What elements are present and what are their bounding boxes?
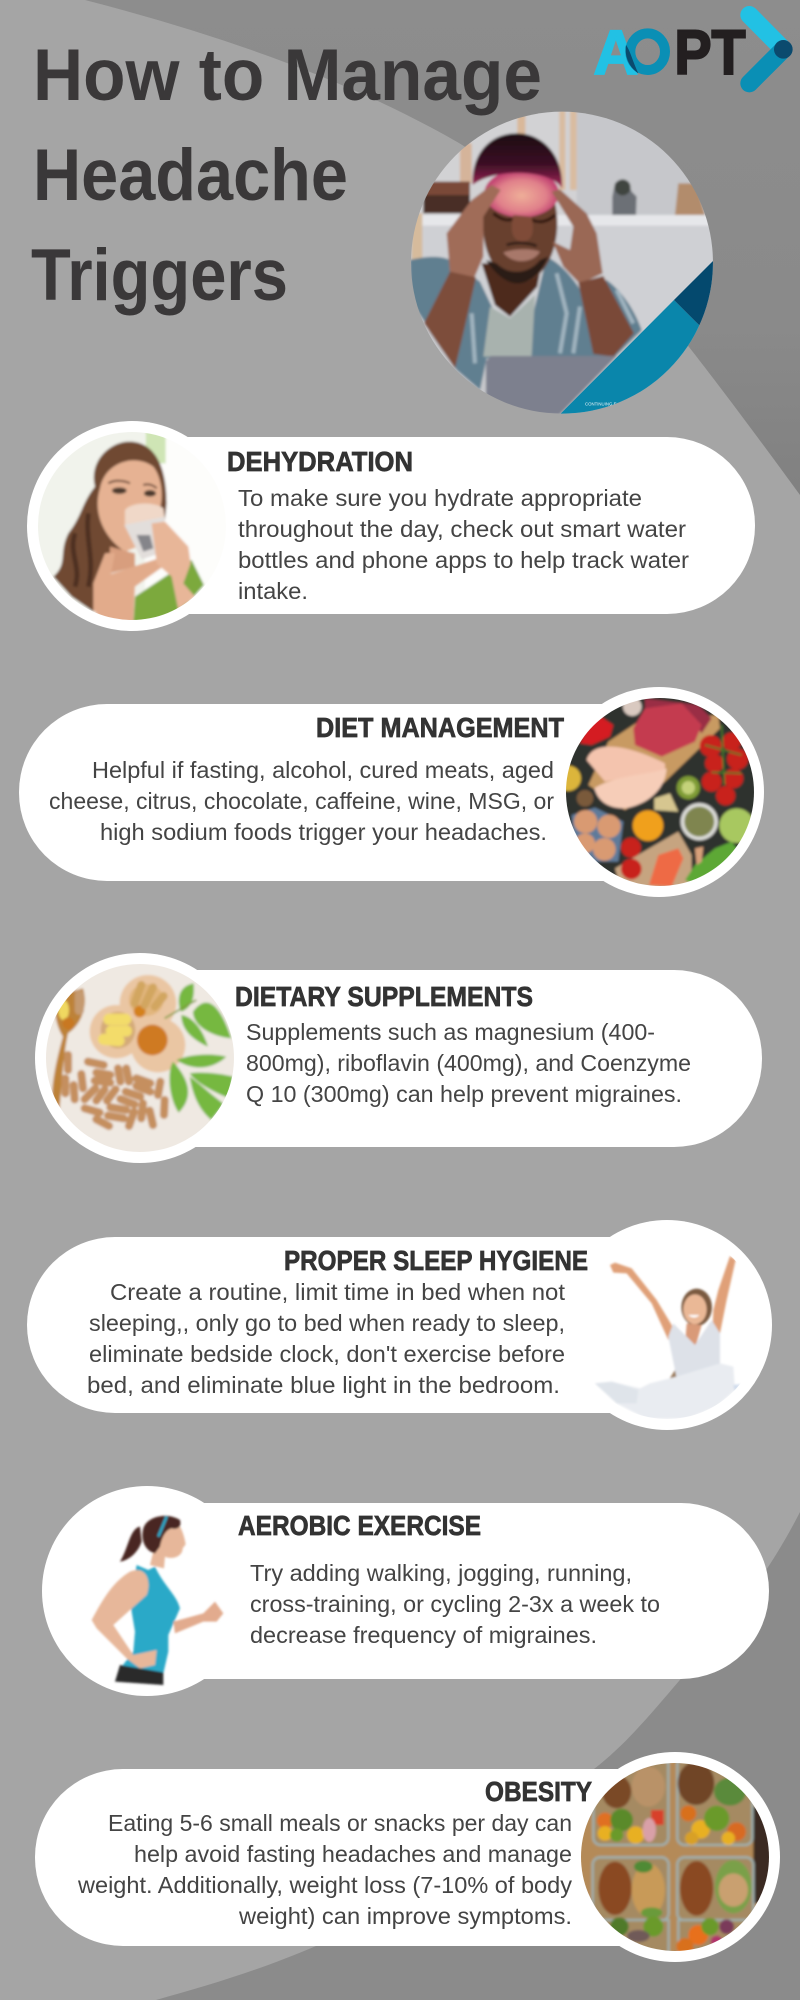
body text: weight. Additionally, weight loss (7-10% of body	[77, 1872, 572, 1898]
body text: To make sure you hydrate appropriate	[238, 485, 642, 511]
title: Headache	[33, 135, 348, 216]
heading: AEROBIC EXERCISE	[238, 1510, 481, 1541]
body text: Try adding walking, jogging, running,	[250, 1560, 632, 1586]
heading: DIET MANAGEMENT	[316, 712, 564, 743]
image: healthy foods	[566, 698, 754, 886]
panel: dehydration	[27, 421, 755, 631]
body text: decrease frequency of migraines.	[250, 1622, 597, 1648]
body text	[246, 1019, 691, 1107]
logo: AOPT	[593, 15, 793, 88]
image: meal prep containers	[581, 1763, 769, 1951]
body text: Create a routine, limit time in bed when not	[110, 1279, 565, 1305]
body text: bottles and phone apps to help track water	[238, 547, 689, 573]
heading: OBESITY	[485, 1776, 592, 1807]
body text: cross-training, or cycling 2-3x a week to	[250, 1591, 660, 1617]
panel: obesity	[35, 1752, 780, 1963]
body text: help avoid fasting headaches and manage	[134, 1841, 572, 1867]
photo: man with headache	[411, 112, 713, 414]
image: woman stretching in bed	[595, 1256, 741, 1419]
body text	[49, 757, 554, 845]
title: Triggers	[31, 235, 288, 316]
body text: Supplements such as magnesium (400-	[246, 1019, 655, 1045]
photo: man with headache: CONTINUING E	[585, 401, 617, 406]
body text: Helpful if fasting, alcohol, cured meats, aged	[92, 757, 554, 783]
panel background	[27, 1220, 772, 1430]
panel: diet management	[19, 687, 764, 898]
body text: cheese, citrus, chocolate, caffeine, wine, MSG, or	[49, 788, 554, 814]
heading: PROPER SLEEP HYGIENE	[284, 1245, 588, 1276]
body text	[250, 1560, 660, 1648]
body text: high sodium foods trigger your headaches.	[100, 819, 547, 845]
body text: intake.	[238, 578, 308, 604]
image: woman drinking water	[38, 432, 206, 620]
body text: 800mg), riboflavin (400mg), and Coenzyme	[246, 1050, 691, 1076]
image: woman running	[92, 1516, 223, 1685]
logo: AOPT: A	[593, 18, 638, 88]
background: darker corner shade	[0, 0, 800, 540]
panel background	[19, 687, 764, 897]
heading: DIETARY SUPPLEMENTS	[235, 981, 533, 1012]
panel background	[27, 421, 755, 631]
body text: Eating 5-6 small meals or snacks per day can	[108, 1810, 572, 1836]
panel: dietary supplements	[35, 953, 762, 1163]
body text	[77, 1810, 572, 1929]
body text: bed, and eliminate blue light in the bedroom.	[87, 1372, 560, 1398]
panel: aerobic exercise	[42, 1486, 769, 1696]
body text: eliminate bedside clock, don't exercise before	[89, 1341, 565, 1367]
body text: sleeping,, only go to bed when ready to sleep,	[89, 1310, 565, 1336]
body text	[87, 1279, 565, 1398]
body text: throughout the day, check out smart water	[238, 516, 686, 542]
image: supplements and leaves	[46, 964, 234, 1152]
panel background	[35, 1752, 780, 1962]
body text: weight) can improve symptoms.	[238, 1903, 572, 1929]
logo: AOPT: PT	[674, 18, 746, 88]
panel background	[42, 1486, 769, 1696]
body text	[238, 485, 689, 604]
title: How to Manage	[33, 35, 542, 116]
body text: Q 10 (300mg) can help prevent migraines.	[246, 1081, 682, 1107]
panel background	[35, 953, 762, 1163]
panel: proper sleep hygiene	[27, 1220, 772, 1430]
title	[31, 35, 542, 316]
heading: DEHYDRATION	[227, 446, 413, 477]
